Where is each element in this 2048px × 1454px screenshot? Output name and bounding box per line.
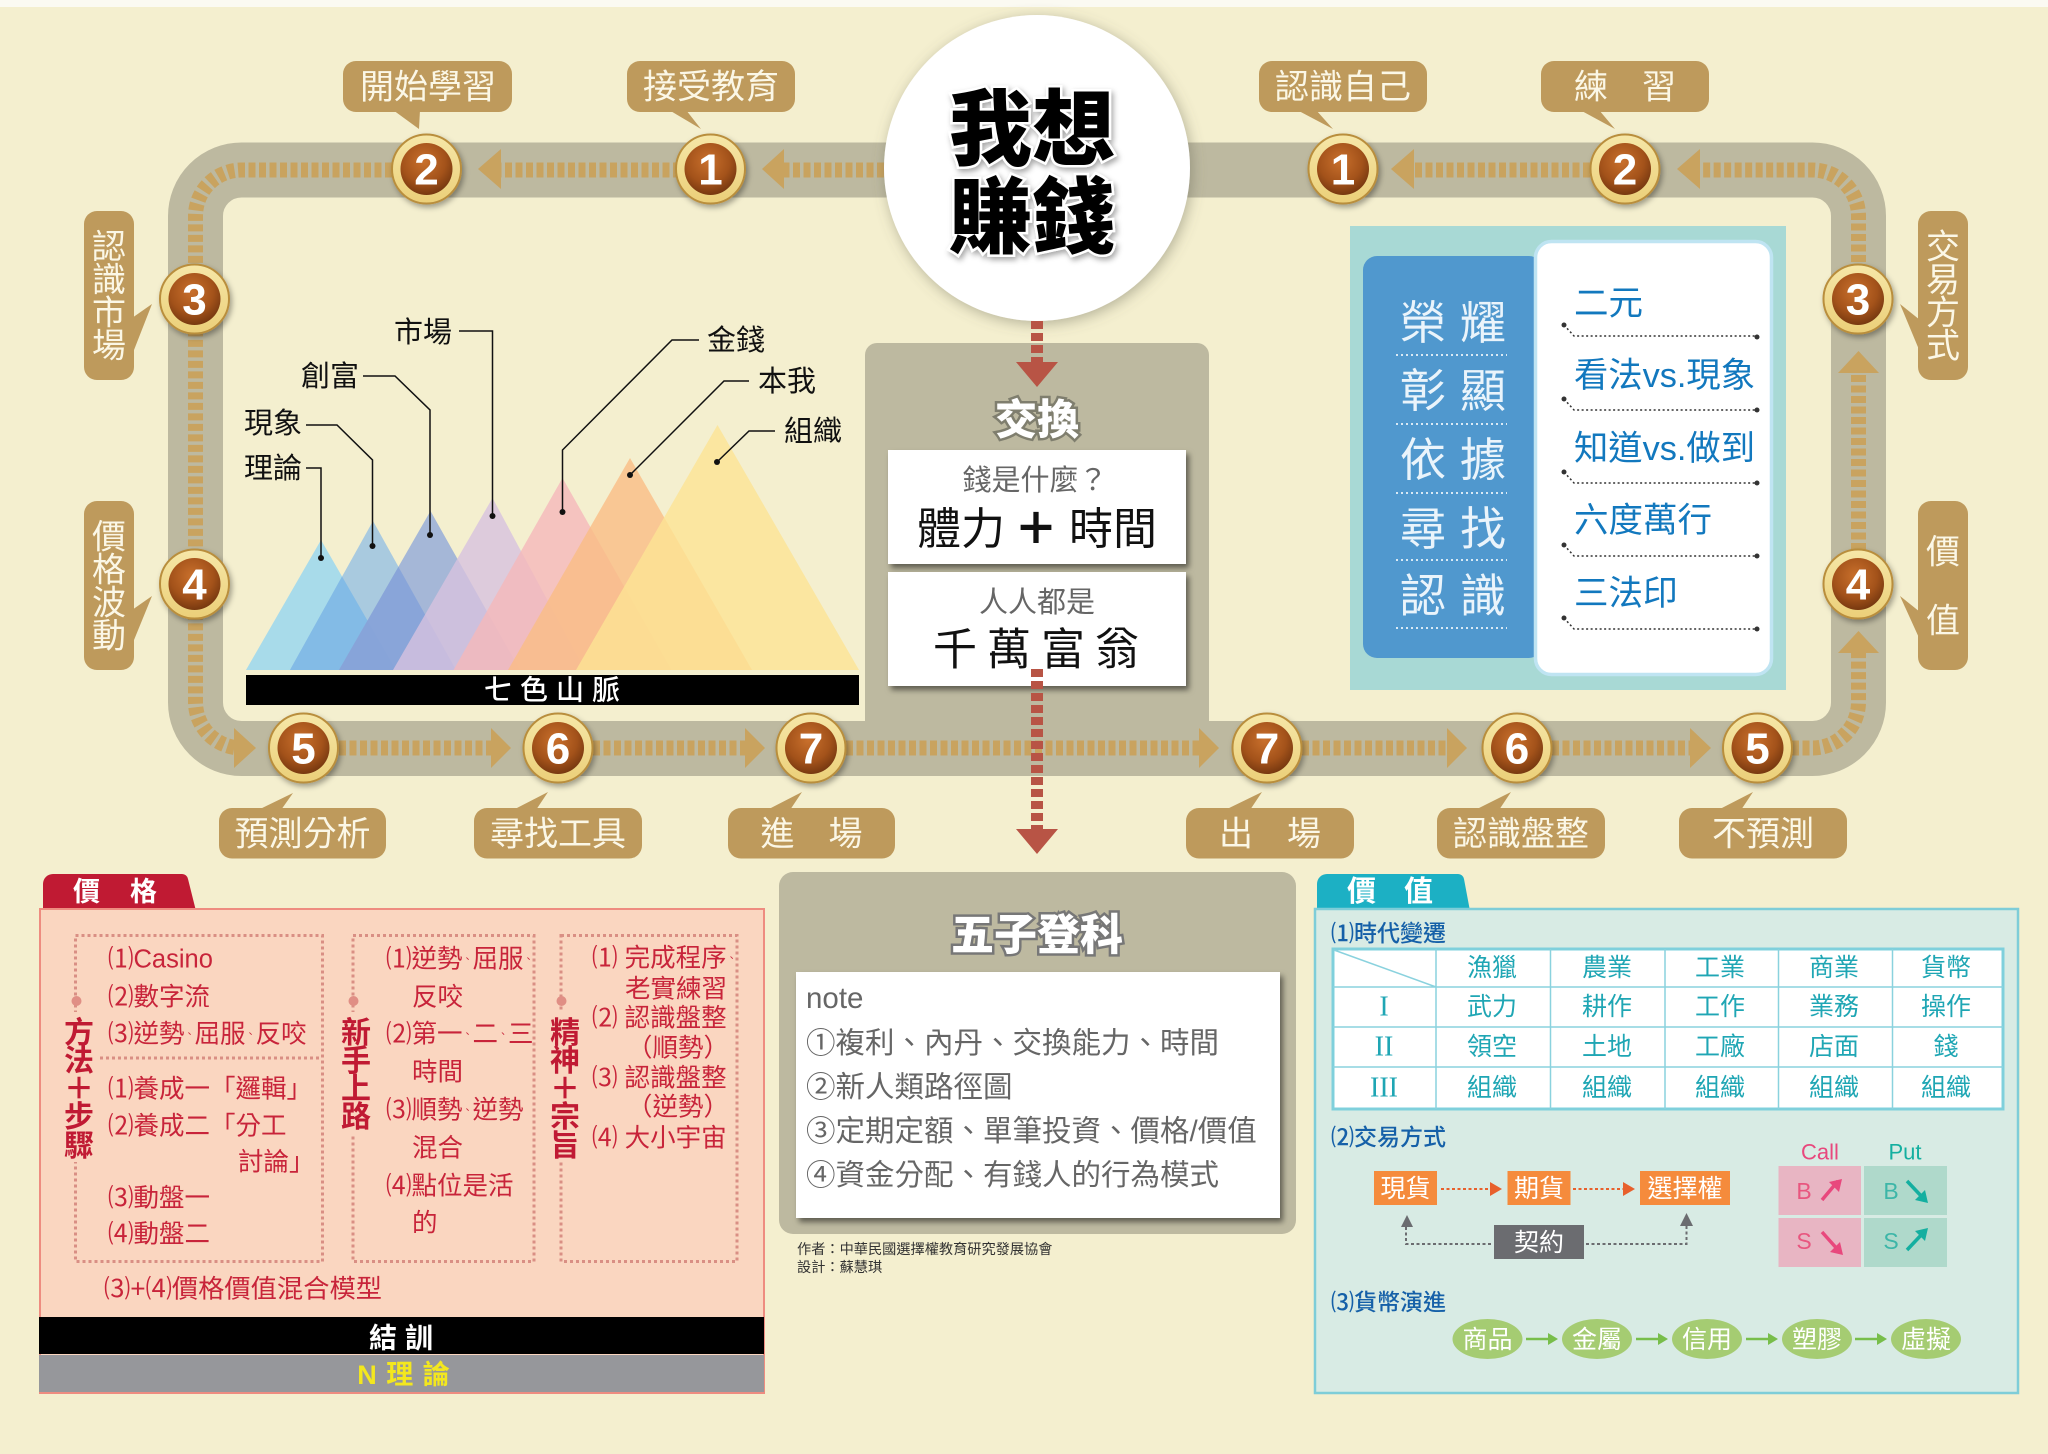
- trading flow diagram: 現貨: [1380, 1175, 1431, 1203]
- left column words: 榮耀: [1400, 297, 1520, 349]
- era table: 工業: [1695, 954, 1745, 982]
- era table: 貨幣: [1921, 954, 1971, 982]
- spirit list: ⑴ 完成程序、: [592, 944, 737, 972]
- era table: 組織: [1809, 1074, 1859, 1102]
- beginner list: ⑶順勢、逆勢: [386, 1096, 524, 1124]
- label: 認識自己: [1259, 61, 1427, 129]
- label: 價值: [1900, 501, 1968, 670]
- node 5 right: [1723, 714, 1792, 782]
- vertical heading: spirit and aim: 精: [550, 1016, 580, 1050]
- heading 1: ⑴時代變遷: [1331, 920, 1446, 946]
- credits: [797, 1242, 1052, 1276]
- node 2 right: [1590, 134, 1660, 204]
- era table: [1333, 949, 2003, 1109]
- vertical heading: spirit and aim: 旨: [550, 1130, 580, 1162]
- era table: 土地: [1582, 1033, 1632, 1061]
- step labels: [84, 61, 1968, 858]
- left column words: 尋找: [1400, 503, 1520, 555]
- label: 交易方式: 方: [1926, 294, 1960, 332]
- node 6 left: [524, 714, 592, 782]
- dotted groups: [76, 936, 737, 1262]
- label: 價格波動: [84, 501, 152, 670]
- heading 3: ⑶貨幣演進: [1331, 1289, 1446, 1315]
- red arrow down top: [1016, 321, 1058, 387]
- node 7 right: 7: [1255, 724, 1279, 774]
- vertical heading: spirit and aim: 宗: [550, 1100, 580, 1134]
- beginner list: ⑴逆勢、屈服、: [386, 946, 534, 974]
- mountain names: 理論: [244, 452, 302, 485]
- left column words: [1400, 297, 1520, 622]
- method list: ⑴養成一「邏輯」: [108, 1076, 312, 1104]
- currency evolution chain: 商品: [1462, 1326, 1513, 1354]
- currency evolution chain: 金屬: [1572, 1326, 1622, 1354]
- method list: ⑴Casino: [108, 946, 213, 974]
- left column words: 認識: [1400, 570, 1520, 622]
- label: 練習: [1541, 61, 1709, 129]
- mountain names: 本我: [758, 365, 816, 398]
- vertical heading: spirit and aim: [548, 1012, 582, 1162]
- node 7 left: [776, 714, 846, 782]
- currency evolution chain: 信用: [1682, 1326, 1732, 1354]
- dashed path segments: [196, 170, 1859, 748]
- exchange card 2: [888, 572, 1186, 686]
- label: 開始學習: 開始學習: [360, 68, 496, 106]
- label: 交易方式: [1900, 211, 1968, 380]
- right column words: 六度萬行: [1574, 502, 1712, 540]
- era table: 漁獵: [1467, 954, 1517, 982]
- node 7 right: [1232, 714, 1302, 782]
- heading 2: ⑵交易方式: [1331, 1124, 1446, 1150]
- mountain leader lines: [306, 331, 775, 558]
- vertical heading: method and steps: 驟: [64, 1130, 94, 1162]
- node 3 right: [1824, 264, 1892, 334]
- note card: [796, 972, 1280, 1218]
- call put matrix: [1778, 1140, 1947, 1267]
- era table: I: [1379, 992, 1389, 1022]
- note card: ③定期定額、單筆投資、價格/價值: [806, 1115, 1257, 1148]
- label: 出場: [1186, 792, 1354, 858]
- left column words: 彰顯: [1400, 365, 1520, 417]
- vertical heading: method and steps: 步: [64, 1100, 94, 1134]
- era table: 業務: [1809, 993, 1859, 1021]
- vertical heading: spirit and aim: 神: [550, 1044, 580, 1078]
- label: 認識市場: 場: [92, 328, 126, 366]
- beginner list: ⑷點位是活: [386, 1172, 514, 1200]
- right column words: 知道vs.做到: [1574, 430, 1755, 468]
- label: 不預測: [1679, 792, 1847, 858]
- node 3 left: 3: [182, 276, 207, 324]
- tab: value: [1317, 874, 1470, 911]
- call put matrix: S: [1796, 1228, 1812, 1254]
- arrowheads: [234, 149, 1879, 768]
- beginner list: 混合: [412, 1134, 463, 1162]
- trading flow diagram: 契約: [1514, 1229, 1564, 1257]
- mountain names: 金錢: [707, 324, 765, 357]
- tab: price: 價格: [73, 877, 187, 907]
- label: 價值: 價: [1926, 534, 1960, 572]
- exchange title: 交換: [995, 396, 1079, 444]
- node 4 right: [1824, 550, 1892, 618]
- note card: ④資金分配、有錢人的行為模式: [806, 1159, 1219, 1192]
- mountain range caption bar: [246, 674, 859, 706]
- spirit list: ⑶ 認識盤整: [592, 1064, 727, 1092]
- chart: seven colour mountains: [244, 316, 859, 706]
- label: 價格波動: 波: [92, 584, 126, 622]
- node 4 left: 4: [182, 560, 207, 610]
- era table: 農業: [1582, 954, 1632, 982]
- central circle title: 我想: [949, 84, 1115, 176]
- label: 認識市場: 市: [92, 294, 126, 332]
- label: 預測分析: [219, 793, 386, 858]
- era table: 耕作: [1582, 993, 1632, 1021]
- label: 交易方式: 式: [1926, 328, 1960, 366]
- exchange card 1: ＋: [1014, 504, 1058, 554]
- mountain names: 創富: [301, 360, 359, 393]
- mountain names: 組織: [784, 415, 842, 448]
- node 3 left: [160, 264, 229, 334]
- credits: 作者：中華民國選擇權教育研究發展協會: [797, 1242, 1052, 1258]
- vertical heading: beginner: 路: [341, 1100, 371, 1134]
- spirit list: ⑷ 大小宇宙: [592, 1124, 727, 1152]
- call put matrix: B: [1796, 1178, 1812, 1204]
- node 5 left: 5: [291, 724, 316, 774]
- node 6 right: [1482, 714, 1552, 782]
- right column words: 三法印: [1574, 575, 1678, 613]
- trading flow diagram: 選擇權: [1647, 1175, 1723, 1203]
- five sons title: 五子登科: [951, 912, 1123, 960]
- call put matrix: S: [1883, 1228, 1899, 1254]
- currency evolution chain: [1452, 1319, 1961, 1359]
- vertical heading: beginner: 新: [341, 1016, 371, 1050]
- label: 進場: [728, 792, 895, 858]
- label: 出場: 出 場: [1219, 816, 1321, 854]
- label: 價值: 值: [1926, 602, 1960, 640]
- era table: 武力: [1467, 993, 1517, 1021]
- note card: ①複利、內丹、交換能力、時間: [806, 1027, 1219, 1060]
- call put matrix: Put: [1888, 1140, 1922, 1164]
- vertical heading: method and steps: ＋: [64, 1072, 94, 1106]
- bar: N theory: [39, 1355, 764, 1392]
- exchange card 2: 千萬富翁: [933, 626, 1149, 674]
- central exchange panel: [865, 343, 1209, 748]
- era table: 工廠: [1695, 1033, 1745, 1061]
- node 1 left: 1: [698, 146, 723, 194]
- beginner list: ⑵第一、二、三: [386, 1020, 534, 1048]
- beginner list: 的: [412, 1210, 438, 1238]
- vertical heading: method and steps: [62, 1012, 96, 1162]
- panel: price: [39, 874, 764, 1393]
- trading flow diagram: 期貨: [1514, 1175, 1564, 1203]
- era table: 組織: [1695, 1074, 1745, 1102]
- label: 接受教育: 接受教育: [643, 68, 779, 106]
- beginner list: 反咬: [412, 984, 463, 1012]
- right column words: [1574, 285, 1755, 613]
- label: 認識市場: 識: [92, 262, 126, 300]
- node 3 right: 3: [1846, 276, 1870, 324]
- mountain names: [244, 316, 842, 485]
- mountain names: 市場: [394, 316, 452, 349]
- label: 尋找工具: [474, 792, 642, 858]
- node 4 left: [160, 550, 229, 618]
- left column words: 依據: [1400, 434, 1520, 486]
- label: 接受教育: [627, 61, 795, 129]
- node 4 right: 4: [1846, 560, 1871, 610]
- right column words: 二元: [1574, 285, 1643, 323]
- node 5 right: 5: [1745, 724, 1770, 774]
- node 6 left: 6: [546, 724, 570, 774]
- spirit list: （順勢）: [627, 1034, 729, 1062]
- panel: blue glory list: [1350, 226, 1786, 690]
- node 5 left: [269, 714, 338, 782]
- node 1 right: [1308, 134, 1378, 204]
- era table: 領空: [1467, 1033, 1517, 1061]
- exchange card 1: [888, 450, 1186, 564]
- central circle title: [884, 15, 1190, 321]
- label: 認識盤整: 認識盤整: [1453, 816, 1589, 854]
- currency evolution chain: 虛擬: [1901, 1326, 1951, 1354]
- era table: 組織: [1921, 1074, 1971, 1102]
- call put matrix: B: [1883, 1178, 1899, 1204]
- spirit list: 老實練習: [625, 976, 727, 1004]
- vertical heading: method and steps: 方: [64, 1016, 94, 1050]
- label: 不預測: 不預測: [1712, 816, 1814, 854]
- credits: 設計：蘇慧琪: [797, 1260, 882, 1276]
- bar: N theory: N 理 論: [357, 1360, 451, 1390]
- label: 開始學習: [343, 61, 512, 129]
- label: 認識市場: 認: [92, 228, 126, 266]
- era table: III: [1370, 1072, 1398, 1104]
- mountain range caption bar: 七色山脈: [484, 674, 628, 706]
- trading flow diagram: [1374, 1171, 1730, 1259]
- mixed model note: ⑶+⑷價格價值混合模型: [104, 1276, 382, 1304]
- label: 認識市場: [84, 211, 152, 380]
- exchange card 2: 人人都是: [979, 587, 1095, 619]
- method list: 討論」: [238, 1148, 315, 1176]
- note card: note: [806, 982, 863, 1015]
- era table: 組織: [1582, 1074, 1632, 1102]
- node 1 left: [676, 134, 745, 204]
- label: 價格波動: 格: [92, 552, 126, 590]
- central circle title: 賺錢: [949, 172, 1115, 264]
- exchange card 1: 時間: [1069, 504, 1157, 554]
- tab: value: 價值: [1347, 875, 1461, 908]
- era table: 錢: [1933, 1033, 1959, 1061]
- node 2 right: 2: [1613, 146, 1637, 194]
- right column words: 看法vs.現象: [1574, 357, 1755, 395]
- exchange card 1: 錢是什麼？: [962, 464, 1108, 497]
- label: 價格波動: 價: [92, 518, 126, 556]
- method list: ⑵養成二「分工: [108, 1112, 287, 1140]
- bar: training: [39, 1317, 764, 1354]
- vertical heading: beginner: 手: [341, 1044, 371, 1078]
- node 1 right: 1: [1331, 146, 1355, 194]
- numbered nodes: [160, 134, 1892, 782]
- method list: [108, 946, 315, 1248]
- era table: 組織: [1467, 1074, 1517, 1102]
- mountain names: 現象: [244, 407, 302, 440]
- era table: 商業: [1809, 954, 1859, 982]
- bar: training: 結訓: [369, 1322, 441, 1354]
- method list: ⑶動盤一: [108, 1184, 210, 1212]
- era table: 操作: [1921, 993, 1971, 1021]
- method list: ⑶逆勢、屈服、反咬: [108, 1020, 307, 1048]
- node 2 left: 2: [414, 146, 439, 194]
- call put matrix: Call: [1801, 1140, 1839, 1164]
- spirit list: （逆勢）: [627, 1094, 729, 1122]
- node 7 left: 7: [799, 724, 823, 774]
- label: 認識自己: 認識自己: [1275, 68, 1411, 106]
- vertical heading: beginner: [340, 1012, 374, 1134]
- node 2 left: [392, 134, 461, 204]
- vertical heading: method and steps: 法: [64, 1044, 94, 1078]
- label: 價格波動: 動: [92, 618, 126, 656]
- label: 交易方式: 交: [1926, 228, 1960, 266]
- note card: ②新人類路徑圖: [806, 1071, 1013, 1104]
- label: 練習: 練 習: [1574, 68, 1676, 106]
- method list: ⑷動盤二: [108, 1220, 210, 1248]
- label: 認識盤整: [1437, 792, 1605, 858]
- label: 進場: 進 場: [760, 816, 862, 854]
- era table: II: [1375, 1032, 1393, 1062]
- label: 交易方式: 易: [1926, 262, 1960, 300]
- red arrow down bottom: [1016, 669, 1058, 854]
- era table: 店面: [1809, 1033, 1859, 1061]
- node 6 right: 6: [1505, 724, 1529, 774]
- spirit list: ⑵ 認識盤整: [592, 1004, 727, 1032]
- era table: 工作: [1695, 993, 1745, 1021]
- beginner list: [386, 946, 534, 1238]
- panel: five sons: [779, 872, 1296, 1234]
- panel: value: [1315, 874, 2018, 1393]
- vertical heading: beginner: 上: [341, 1072, 371, 1106]
- label: 預測分析: 預測分析: [234, 816, 370, 854]
- currency evolution chain: 塑膠: [1792, 1326, 1842, 1354]
- beginner list: 時間: [412, 1058, 463, 1086]
- vertical heading: spirit and aim: ＋: [550, 1072, 580, 1106]
- tab: price: [43, 874, 196, 911]
- method list: ⑵數字流: [108, 984, 210, 1012]
- label: 尋找工具: 尋找工具: [490, 816, 626, 854]
- spirit list: [592, 944, 737, 1152]
- exchange card 1: 體力: [917, 504, 1005, 554]
- track loop: [196, 149, 1879, 768]
